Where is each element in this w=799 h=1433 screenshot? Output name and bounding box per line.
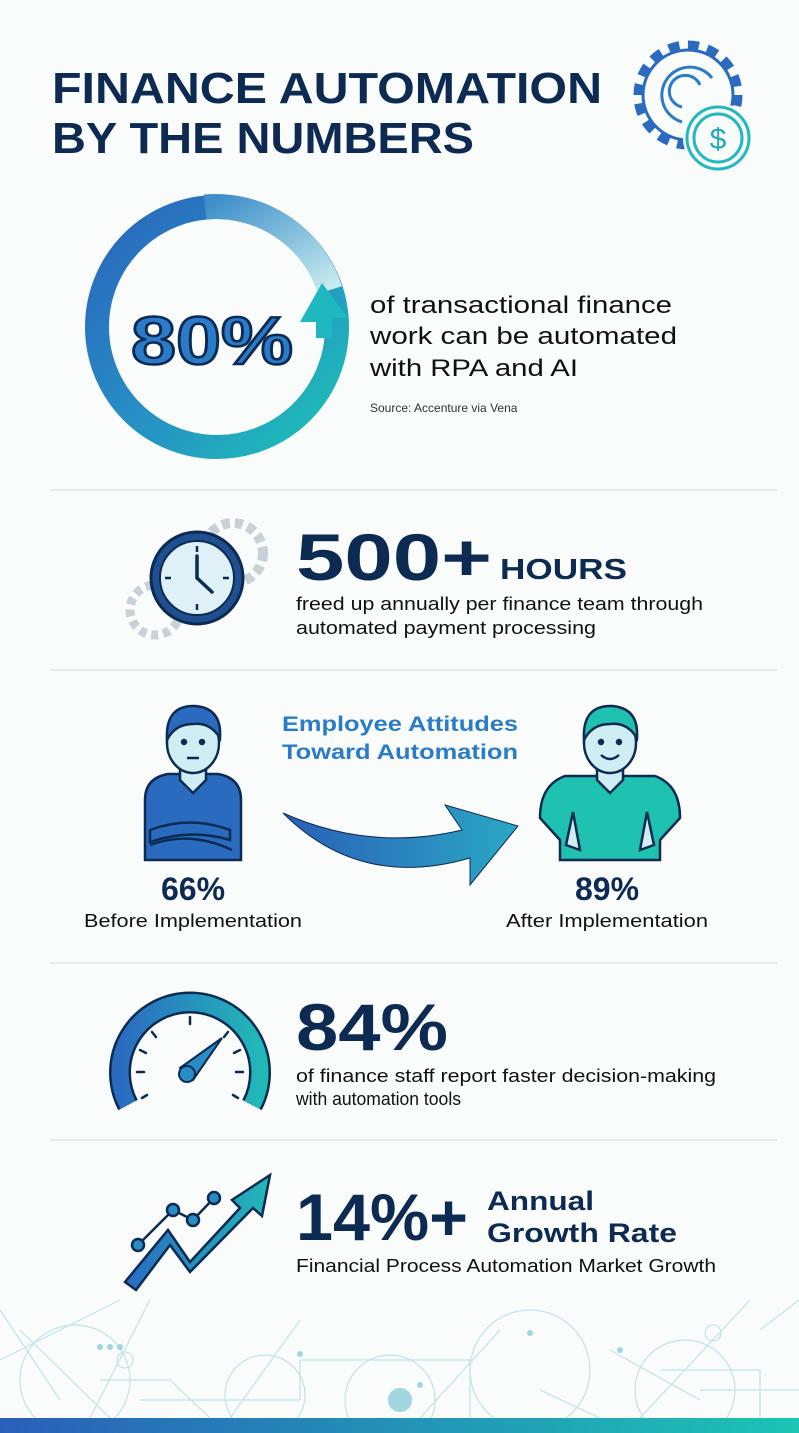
decorative footer network bbox=[0, 1300, 799, 1433]
heading: employee attitudes: Toward Automation bbox=[282, 741, 518, 764]
stat: 500+ hours: 500+ bbox=[296, 520, 492, 594]
heading: employee attitudes: Employee Attitudes bbox=[282, 713, 518, 736]
stat: 500+ hours: HOURS bbox=[500, 554, 627, 586]
stat: 500+ hours bbox=[296, 520, 703, 638]
title: BY THE NUMBERS bbox=[52, 114, 474, 163]
icon: person before (arms crossed) bbox=[145, 706, 241, 860]
icon: speedometer bbox=[120, 1003, 260, 1105]
icon: gear with dollar bbox=[638, 45, 751, 171]
heading: employee attitudes bbox=[282, 713, 518, 764]
stat: 84%: of finance staff report faster decision-making bbox=[296, 1066, 716, 1086]
text: 80% description: work can be automated bbox=[369, 323, 677, 350]
stat: 89% after: 89% bbox=[575, 871, 639, 907]
stat: 89% after bbox=[506, 871, 708, 931]
stat: 66% before: Before Implementation bbox=[84, 911, 302, 931]
stat: 14%+ growth: 14%+ bbox=[296, 1180, 468, 1254]
arrow: before to after bbox=[283, 805, 518, 885]
stat: 14%+ growth: Growth Rate bbox=[487, 1218, 677, 1248]
stat: 84%: 84% bbox=[296, 990, 448, 1064]
stat: 89% after: After Implementation bbox=[506, 911, 708, 931]
stat: 66% before bbox=[84, 871, 302, 931]
stat: 14%+ growth: Financial Process Automation Market Growth bbox=[296, 1256, 716, 1276]
title bbox=[52, 64, 602, 163]
footer gradient bar bbox=[0, 1418, 799, 1433]
ring chart 80% bbox=[97, 207, 348, 447]
stat: 14%+ growth bbox=[296, 1180, 716, 1276]
icon: gear with dollar: $ bbox=[710, 123, 727, 156]
text: 80% description: Source: Accenture via Vena bbox=[370, 401, 518, 415]
stat: 500+ hours: automated payment processing bbox=[296, 618, 596, 638]
text: 80% description: of transactional finance bbox=[370, 292, 672, 319]
stat: 500+ hours: freed up annually per finance team through bbox=[296, 594, 703, 614]
ring chart 80%: 80% bbox=[131, 303, 293, 379]
title: FINANCE AUTOMATION bbox=[52, 64, 602, 113]
text: 80% description bbox=[369, 292, 677, 415]
stat: 84% bbox=[295, 990, 716, 1109]
icon: growth chart arrow bbox=[125, 1175, 270, 1290]
stat: 14%+ growth: Annual bbox=[487, 1186, 594, 1216]
stat: 66% before: 66% bbox=[161, 871, 225, 907]
icon: clock with gears bbox=[130, 523, 263, 635]
text: 80% description: with RPA and AI bbox=[369, 355, 578, 382]
stat: 84%: with automation tools bbox=[295, 1089, 461, 1109]
icon: person after (happy) bbox=[540, 706, 680, 860]
